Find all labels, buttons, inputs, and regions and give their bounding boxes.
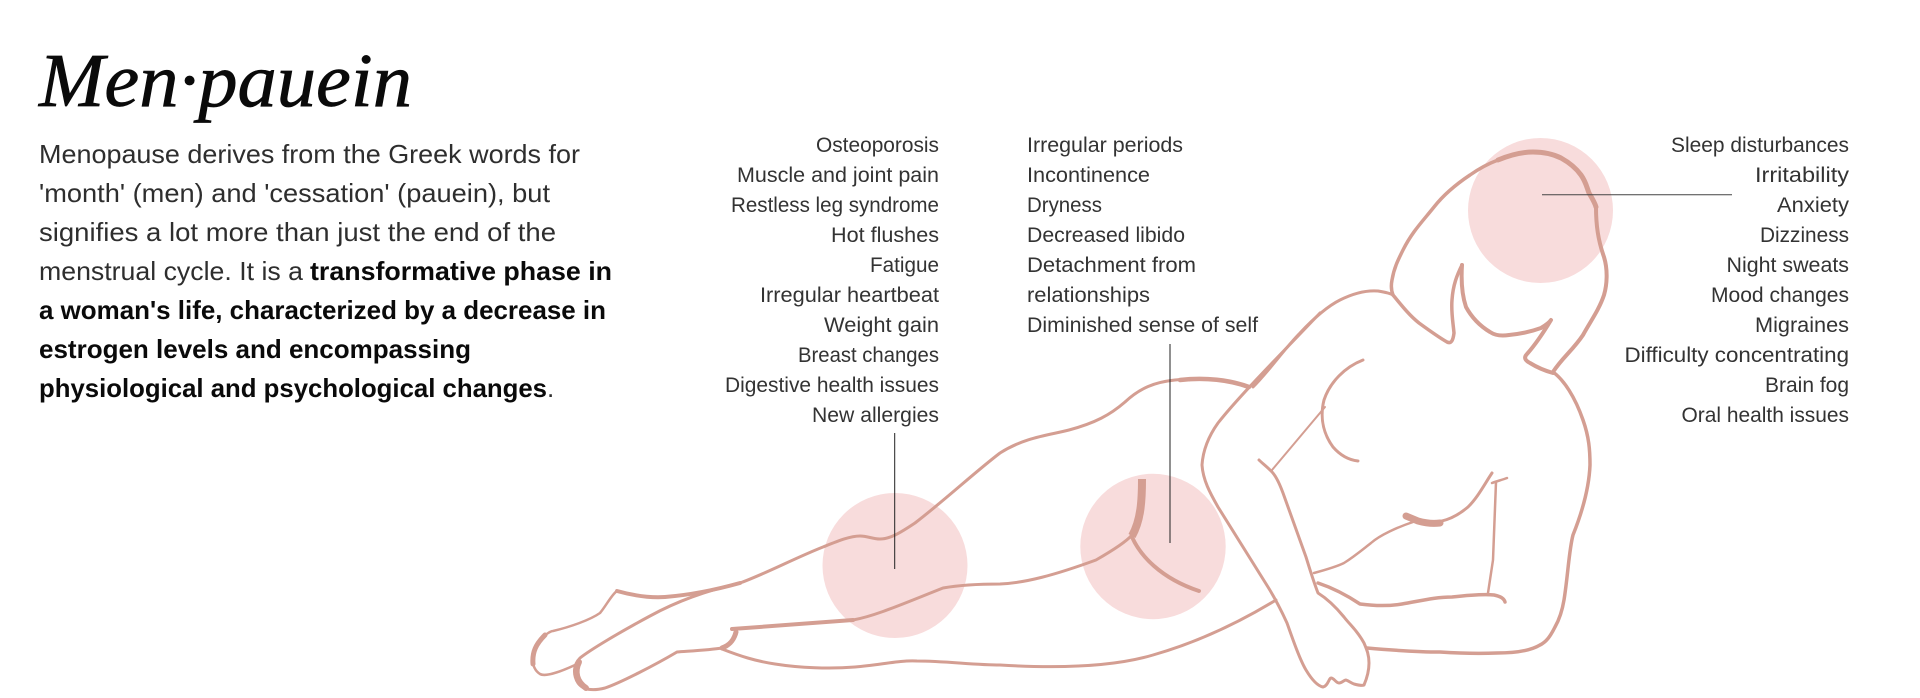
upper leg and hip contour xyxy=(740,379,1249,583)
lower thigh line into groin xyxy=(853,535,1132,620)
title: Men·pauein xyxy=(38,39,412,123)
intro paragraph: a woman's life, characterized by a decrease in xyxy=(39,295,606,325)
intro paragraph: menstrual cycle. It is a xyxy=(39,256,304,286)
symptom list: head: Difficulty concentrating xyxy=(1624,343,1849,367)
symptom list: head: Night sweats xyxy=(1726,253,1849,277)
symptom list: body: Osteoporosis xyxy=(816,133,939,157)
leader line: head xyxy=(1542,194,1732,196)
symptom list: body: Hot flushes xyxy=(831,223,939,247)
symptom list: reproductive: Dryness xyxy=(1027,193,1102,217)
intro paragraph: estrogen levels and encompassing xyxy=(39,334,471,364)
intro paragraph: transformative phase in xyxy=(310,256,612,286)
groin lines xyxy=(1132,479,1199,591)
symptom list: body: Irregular heartbeat xyxy=(760,283,939,307)
symptom list: reproductive: Incontinence xyxy=(1027,163,1150,187)
symptom list: reproductive: Decreased libido xyxy=(1027,223,1185,247)
waist line xyxy=(1314,522,1413,573)
back and elbow xyxy=(1367,372,1590,653)
symptom list: head: Dizziness xyxy=(1760,223,1849,247)
forearm and hand xyxy=(1202,313,1369,687)
inner elbow line xyxy=(1318,583,1505,606)
neck and chin xyxy=(1462,265,1553,373)
symptom list: head: Migraines xyxy=(1755,313,1849,337)
symptom list: body xyxy=(725,133,939,427)
symptom list: body: Restless leg syndrome xyxy=(731,193,939,217)
symptom list: reproductive: Diminished sense of self xyxy=(1027,313,1258,337)
intro paragraph: 'month' (men) and 'cessation' (pauein), but xyxy=(39,178,551,208)
intro paragraph: Menopause derives from the Greek words for xyxy=(39,139,580,169)
intro paragraph: . xyxy=(547,373,554,403)
highlight circle: pelvis xyxy=(1080,474,1226,619)
symptom list: body: New allergies xyxy=(812,403,939,427)
symptom list: head: Anxiety xyxy=(1777,193,1849,217)
symptom list: reproductive: Detachment from xyxy=(1027,253,1196,277)
symptom list: body: Breast changes xyxy=(798,343,939,367)
leader line: legs xyxy=(894,433,896,569)
reclining woman outline xyxy=(532,152,1607,690)
symptom list: reproductive: relationships xyxy=(1027,283,1150,307)
symptom list: reproductive xyxy=(1027,133,1258,337)
symptom list: body: Digestive health issues xyxy=(725,373,939,397)
breast curve xyxy=(1322,360,1363,461)
highlight circle: head xyxy=(1468,138,1613,283)
near foot and shin xyxy=(574,583,853,690)
symptom list: body: Weight gain xyxy=(824,313,939,337)
symptom list: body: Muscle and joint pain xyxy=(737,163,939,187)
hair xyxy=(1391,152,1607,372)
leader line: pelvis xyxy=(1169,344,1171,543)
symptom list: head xyxy=(1624,133,1849,427)
intro paragraph: physiological and psychological changes xyxy=(39,373,547,403)
calf and bottom hip line xyxy=(722,600,1276,668)
intro paragraph: signifies a lot more than just the end of the xyxy=(39,217,556,247)
symptom list: head: Oral health issues xyxy=(1682,403,1849,427)
thick hip highlight xyxy=(1180,379,1249,387)
symptom list: head: Irritability xyxy=(1755,163,1849,187)
far foot xyxy=(532,583,740,675)
underbust curve xyxy=(1406,473,1507,523)
symptom list: body: Fatigue xyxy=(870,253,939,277)
symptom list: head: Brain fog xyxy=(1765,373,1849,397)
intro paragraph xyxy=(39,139,612,403)
upper arm vertical line xyxy=(1488,482,1496,593)
highlight circle: legs xyxy=(822,493,968,638)
symptom list: reproductive: Irregular periods xyxy=(1027,133,1183,157)
symptom list: head: Mood changes xyxy=(1711,283,1849,307)
bust line xyxy=(1272,407,1325,470)
shoulder to neck upper arm xyxy=(1253,291,1393,387)
symptom list: head: Sleep disturbances xyxy=(1671,133,1849,157)
